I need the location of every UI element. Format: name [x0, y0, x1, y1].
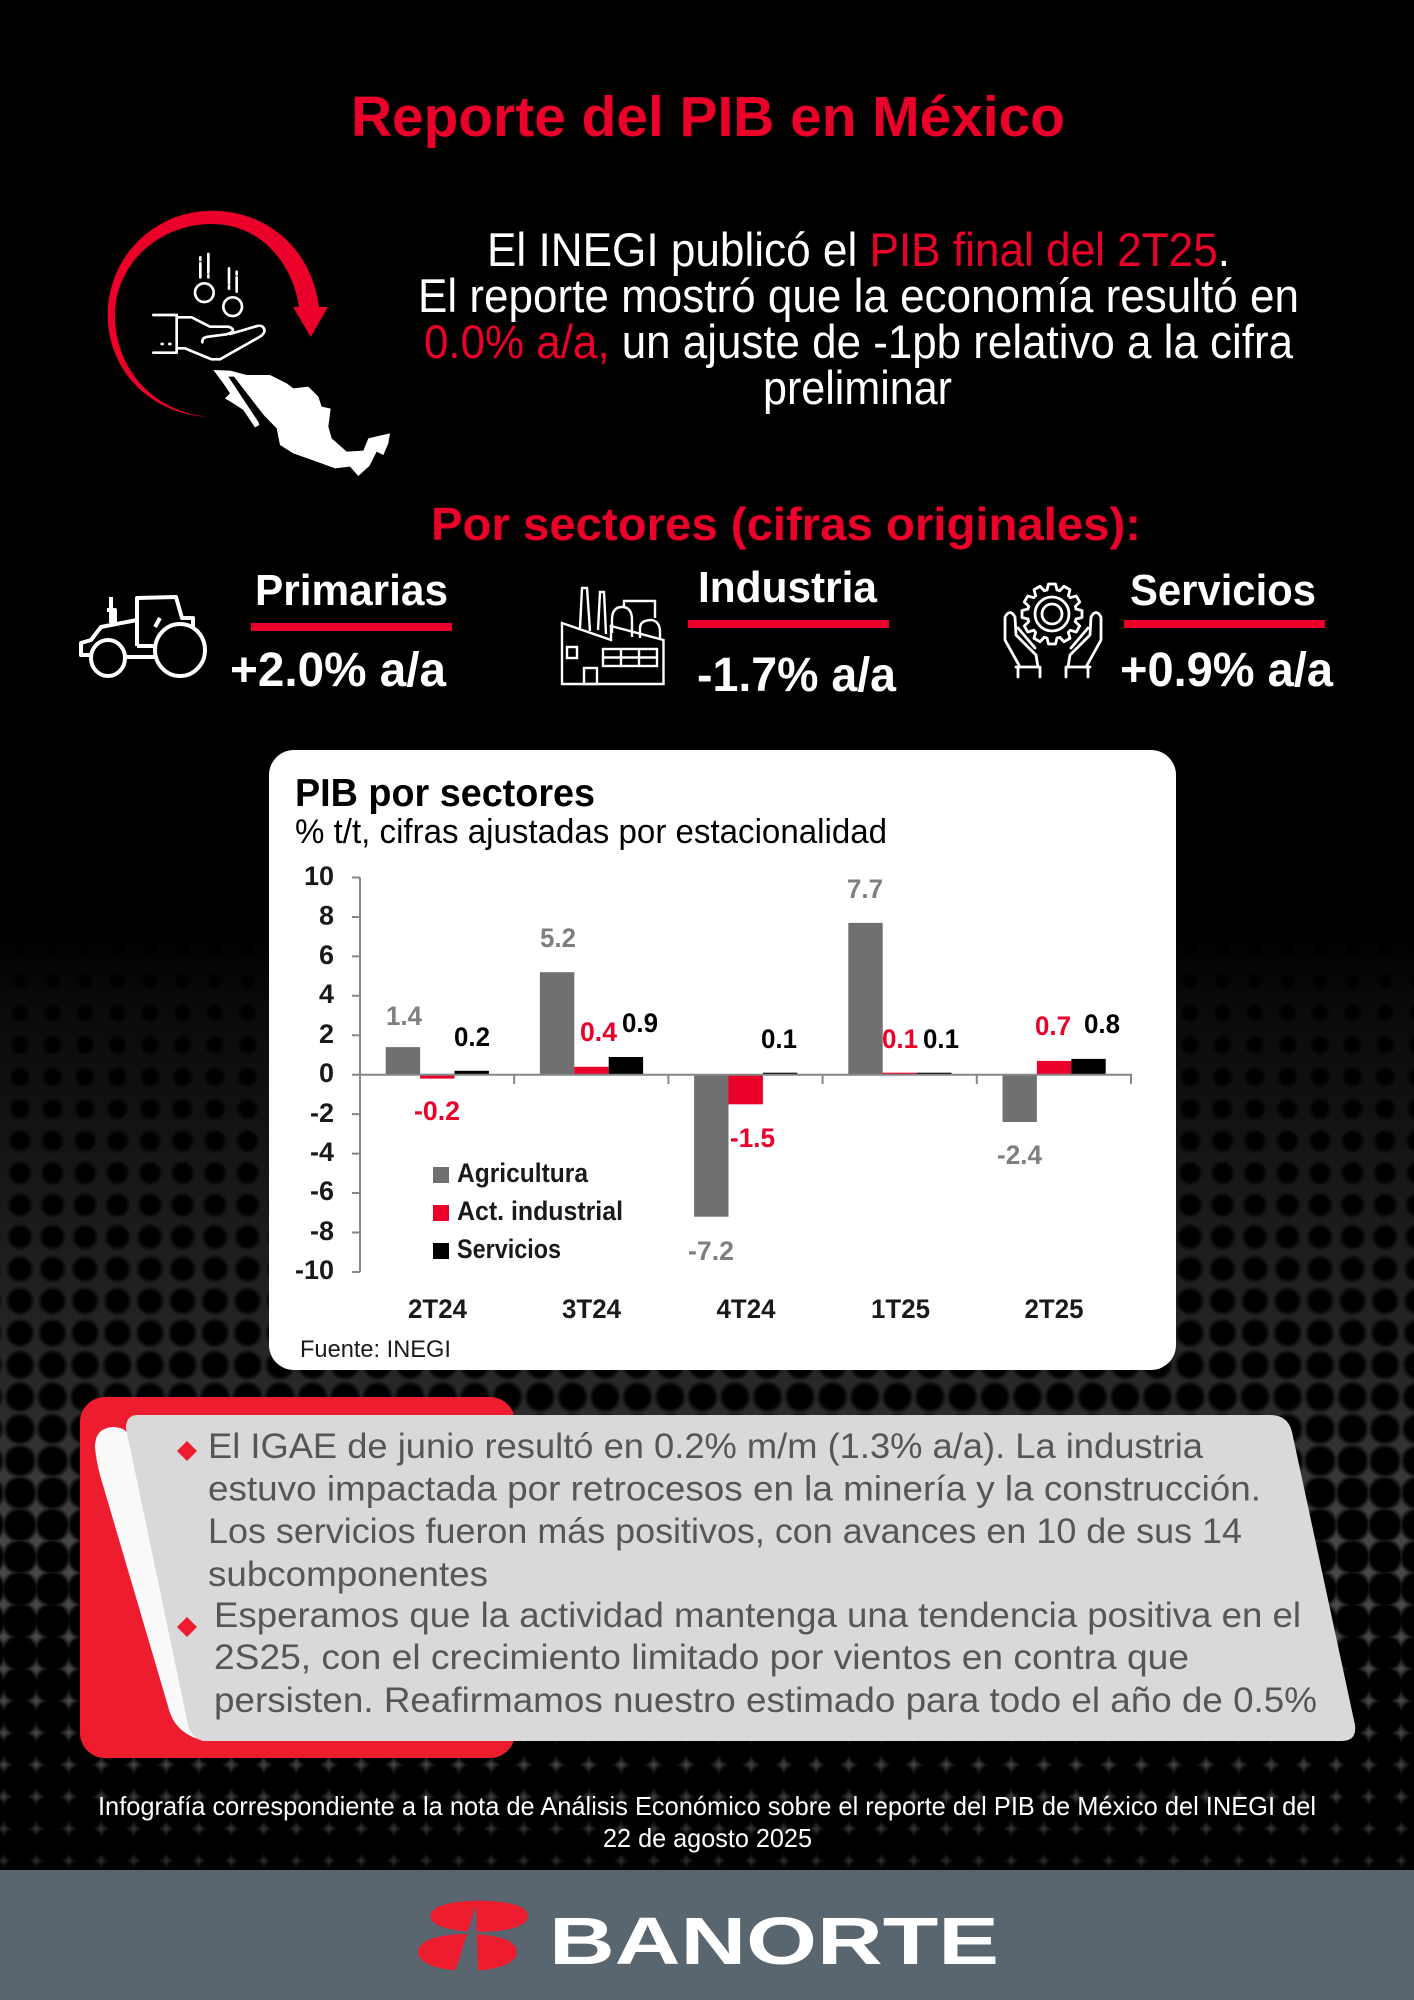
- grey text panel: [126, 1415, 1355, 1741]
- bars: servicios: [454, 1057, 1106, 1075]
- category labels: 3T24: [562, 1294, 621, 1324]
- category labels: [408, 1294, 1084, 1324]
- chart subtitle: % t/t, cifras ajustadas por estacionalidad: [295, 813, 887, 851]
- source: Fuente: INEGI: [300, 1336, 451, 1363]
- data labels: servicios: [454, 1008, 1120, 1054]
- data labels: actividad industrial: -1.5: [730, 1123, 775, 1153]
- chart title: PIB por sectores: [295, 772, 595, 815]
- paragraph: subcomponentes: [208, 1555, 488, 1594]
- paragraph: El IGAE de junio resultó en 0.2% m/m (1.3% a/a). La industria: [208, 1427, 1204, 1466]
- y axis labels: [295, 861, 334, 1285]
- paragraph: estuvo impactada por retrocesos en la minería y la construcción.: [208, 1470, 1261, 1508]
- bullet: IGAE: [177, 1427, 1261, 1594]
- footer band: [0, 1870, 1414, 2000]
- data labels: actividad industrial: 0.7: [1035, 1011, 1071, 1041]
- red rule: [251, 623, 452, 631]
- logo: Banorte: [418, 1901, 999, 1979]
- y axis labels: 8: [319, 900, 334, 930]
- y axis labels: 4: [319, 979, 334, 1009]
- sector: primarias: [81, 566, 452, 697]
- y axis labels: 10: [304, 861, 334, 891]
- value: -1.7% a/a: [697, 649, 896, 702]
- data labels: actividad industrial: -0.2: [414, 1096, 460, 1126]
- diamond: [177, 1617, 197, 1637]
- category labels: 2T25: [1024, 1294, 1084, 1324]
- bars: actividad industrial: [420, 1061, 1071, 1104]
- label: Primarias: [255, 566, 448, 615]
- paragraph: [208, 1427, 1261, 1594]
- footnote: Infografía correspondiente a la nota de Análisis Económico sobre el reporte del PIB de México del INEGI del: [98, 1791, 1316, 1821]
- legend: Agricultura: [457, 1158, 589, 1188]
- legend: Act. industrial: [457, 1196, 623, 1226]
- y axis labels: 2: [319, 1019, 334, 1049]
- value: +2.0% a/a: [230, 644, 446, 697]
- red rule: [1124, 620, 1325, 628]
- icon: factory: [562, 588, 664, 684]
- label: Industria: [698, 563, 878, 612]
- y axis labels: -6: [310, 1176, 334, 1206]
- data labels: actividad industrial: [414, 1011, 1071, 1153]
- data labels: agricultura: -2.4: [997, 1140, 1042, 1170]
- footnote: 22 de agosto 2025: [603, 1823, 812, 1853]
- icon: hand receiving coins: [153, 254, 264, 359]
- category labels: 2T24: [408, 1294, 467, 1324]
- paragraph: Los servicios fueron más positivos, con avances en 10 de sus 14: [208, 1512, 1242, 1551]
- data labels: agricultura: 5.2: [540, 923, 576, 953]
- logo symbol: [418, 1901, 528, 1972]
- zero axis: [360, 1075, 1132, 1084]
- data labels: agricultura: [386, 874, 1042, 1266]
- y axis: [352, 878, 360, 1272]
- sector: industria: [562, 563, 896, 702]
- data labels: actividad industrial: 0.4: [580, 1017, 617, 1047]
- category labels: 4T24: [716, 1294, 776, 1324]
- data labels: servicios: 0.2: [454, 1022, 490, 1052]
- heading: sectors: Por sectores (cifras originales):: [431, 498, 1141, 550]
- legend: [433, 1158, 623, 1264]
- icon: tractor: [81, 597, 205, 676]
- intro text: [418, 223, 1299, 414]
- red rule: [688, 620, 889, 628]
- y axis labels: -8: [310, 1216, 334, 1246]
- icon: red circular arrow: [108, 211, 328, 417]
- data labels: agricultura: -7.2: [688, 1236, 734, 1266]
- data labels: servicios: 0.1: [923, 1024, 959, 1054]
- y axis labels: 0: [319, 1058, 334, 1088]
- intro text: preliminar: [763, 361, 952, 414]
- bullet: expectations: [177, 1596, 1317, 1720]
- data labels: servicios: 0.9: [622, 1008, 658, 1038]
- data labels: actividad industrial: 0.1: [882, 1024, 918, 1054]
- paragraph: [214, 1596, 1317, 1720]
- data labels: servicios: 0.8: [1084, 1009, 1120, 1039]
- icon: hand, coins, arrow and map of Mexico: [108, 211, 390, 476]
- y axis labels: -10: [295, 1255, 334, 1285]
- data labels: agricultura: 1.4: [386, 1001, 422, 1031]
- icon: hands holding gear: [1005, 584, 1101, 677]
- value: +0.9% a/a: [1120, 644, 1333, 697]
- data labels: servicios: 0.1: [761, 1024, 797, 1054]
- y axis labels: -2: [310, 1098, 334, 1128]
- footnote: [98, 1791, 1316, 1853]
- panel: commentary: [80, 1397, 1355, 1758]
- category labels: 1T25: [871, 1294, 930, 1324]
- intro text: El reporte mostró que la economía resultó en: [418, 269, 1299, 322]
- red backing box: [80, 1397, 515, 1758]
- bar chart: [295, 861, 1132, 1324]
- logo wordmark: BANORTE: [549, 1904, 999, 1979]
- diamond: [177, 1441, 197, 1461]
- icon: map of Mexico: [213, 370, 390, 476]
- legend: Servicios: [457, 1234, 561, 1264]
- title: Reporte del PIB en México: [351, 85, 1065, 149]
- paragraph: persisten. Reafirmamos nuestro estimado para todo el año de 0.5%: [214, 1681, 1317, 1720]
- sector: servicios: [1005, 566, 1333, 697]
- intro text: 0.0% a/a, un ajuste de -1pb relativo a la cifra: [424, 315, 1294, 368]
- panel: chart card: [269, 750, 1176, 1370]
- y axis labels: 6: [319, 940, 334, 970]
- bars: agricultura: [386, 923, 1037, 1217]
- intro text: El INEGI publicó el PIB final del 2T25.: [487, 223, 1230, 276]
- label: Servicios: [1130, 566, 1316, 615]
- data labels: agricultura: 7.7: [847, 874, 883, 904]
- paragraph: Esperamos que la actividad mantenga una tendencia positiva en el: [214, 1596, 1301, 1635]
- paragraph: 2S25, con el crecimiento limitado por vientos en contra que: [214, 1638, 1189, 1677]
- white paper curl: [95, 1427, 215, 1741]
- y axis labels: -4: [310, 1137, 334, 1167]
